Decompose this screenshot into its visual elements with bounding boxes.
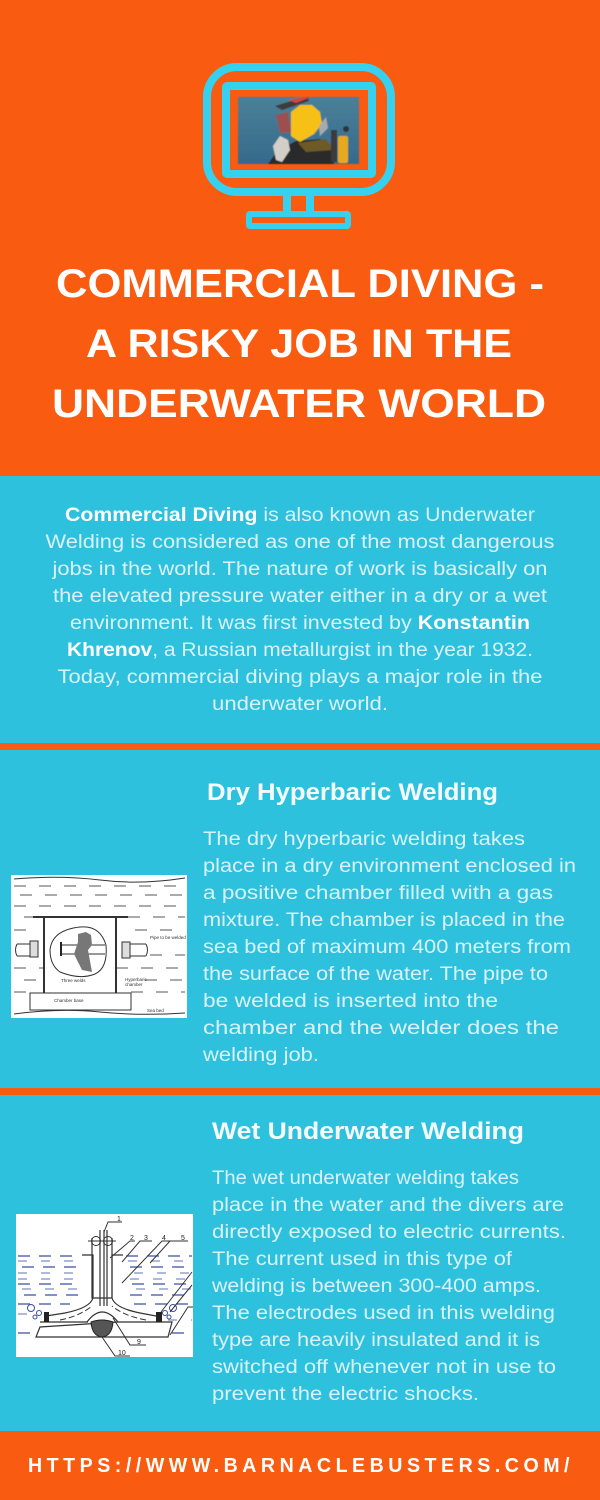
text block: wet welding description: [211, 1168, 566, 1405]
text block: wet welding description: The wet underwater welding takes: [212, 1168, 519, 1189]
text block: introduction: [46, 505, 554, 715]
text block: wet welding description: switched off whenever not in use to: [212, 1357, 556, 1378]
text block: wet welding description: prevent the electric shocks.: [212, 1384, 479, 1405]
diagram: wet welding cross-section: 3: [144, 1235, 148, 1242]
panel: wet underwater welding: [0, 1095, 600, 1431]
text block: dry welding description: welding job.: [202, 1045, 319, 1066]
text block: wet welding description: welding is between 300-400 amps.: [211, 1276, 541, 1297]
text block: introduction: underwater world.: [212, 694, 388, 715]
text block: wet welding description: The current used in this type of: [212, 1249, 513, 1270]
heading: wet underwater welding: Wet Underwater Welding: [212, 1118, 524, 1145]
footer url: HTTPS://WWW.BARNACLEBUSTERS.COM/: [28, 1455, 574, 1477]
text block: introduction: Khrenov , a Russian metallurgist in the year 1932.: [67, 640, 533, 661]
diagram: dry hyperbaric chamber: chamber: [125, 982, 143, 987]
text block: introduction: Commercial Diving is also known as Underwater: [65, 505, 536, 526]
text block: wet welding description: The electrodes used in this welding: [212, 1303, 555, 1324]
panel: header background: [0, 0, 600, 476]
title: [52, 262, 546, 426]
diagram: wet welding cross-section: 1: [117, 1216, 121, 1223]
diagram: wet welding cross-section: 5: [181, 1235, 185, 1242]
diagram: wet welding cross-section: 4: [162, 1235, 166, 1242]
diagram: dry hyperbaric chamber: Three welds: [61, 978, 86, 983]
text block: dry welding description: mixture. The chamber is placed in the: [203, 910, 565, 931]
heading: dry hyperbaric welding: Dry Hyperbaric Welding: [207, 779, 498, 806]
text block: dry welding description: place in a dry environment enclosed in: [203, 856, 576, 877]
diver photo: [238, 97, 359, 164]
text block: wet welding description: place in the water and the divers are: [212, 1195, 564, 1216]
footer band: [0, 1431, 600, 1500]
diagram: dry hyperbaric chamber: Pipe to be welded: [150, 935, 186, 940]
diagram: wet welding cross-section: 10: [118, 1350, 126, 1357]
diagram: dry hyperbaric chamber: Chamber base: [54, 998, 84, 1003]
title: A RISKY JOB IN THE: [86, 322, 512, 366]
divider band: [0, 1088, 600, 1095]
text block: introduction: jobs in the world. The nature of work is basically on: [51, 559, 548, 580]
text block: dry welding description: The dry hyperbaric welding takes: [203, 829, 525, 850]
text block: wet welding description: type are heavily insulated and it is: [212, 1330, 540, 1351]
diagram: dry hyperbaric chamber: [11, 875, 187, 1018]
text block: dry welding description: be welded is inserted into the: [203, 991, 498, 1012]
icon: monitor with diver photo: [207, 67, 391, 226]
diagram: dry hyperbaric chamber: Sea bed: [147, 1008, 164, 1013]
diagram: wet welding cross-section: 9: [137, 1339, 141, 1346]
text block: introduction: environment. It was first invested by Konstantin: [70, 613, 530, 634]
diagram: wet welding cross-section: [16, 1214, 193, 1357]
text block: dry welding description: [202, 829, 576, 1066]
text block: dry welding description: a positive chamber filled with a gas: [203, 883, 553, 904]
text block: wet welding description: directly exposed to electric currents.: [212, 1222, 566, 1243]
text block: dry welding description: the surface of the water. The pipe to: [203, 964, 548, 985]
diagram: dry hyperbaric chamber: Hyperbaric: [125, 977, 148, 982]
title: UNDERWATER WORLD: [52, 382, 546, 426]
divider band: [0, 743, 600, 750]
text block: introduction: Welding is considered as one of the most dangerous: [46, 532, 554, 553]
diagram: wet welding cross-section: 2: [130, 1235, 134, 1242]
text block: dry welding description: sea bed of maximum 400 meters from: [203, 937, 571, 958]
text block: introduction: Today, commercial diving plays a major role in the: [58, 667, 542, 688]
text block: introduction: the elevated pressure water either in a dry or a wet: [53, 586, 548, 607]
panel: introduction: [0, 476, 600, 743]
title: COMMERCIAL DIVING -: [56, 262, 544, 306]
text block: dry welding description: chamber and the welder does the: [203, 1018, 559, 1039]
panel: dry hyperbaric welding: [0, 750, 600, 1088]
